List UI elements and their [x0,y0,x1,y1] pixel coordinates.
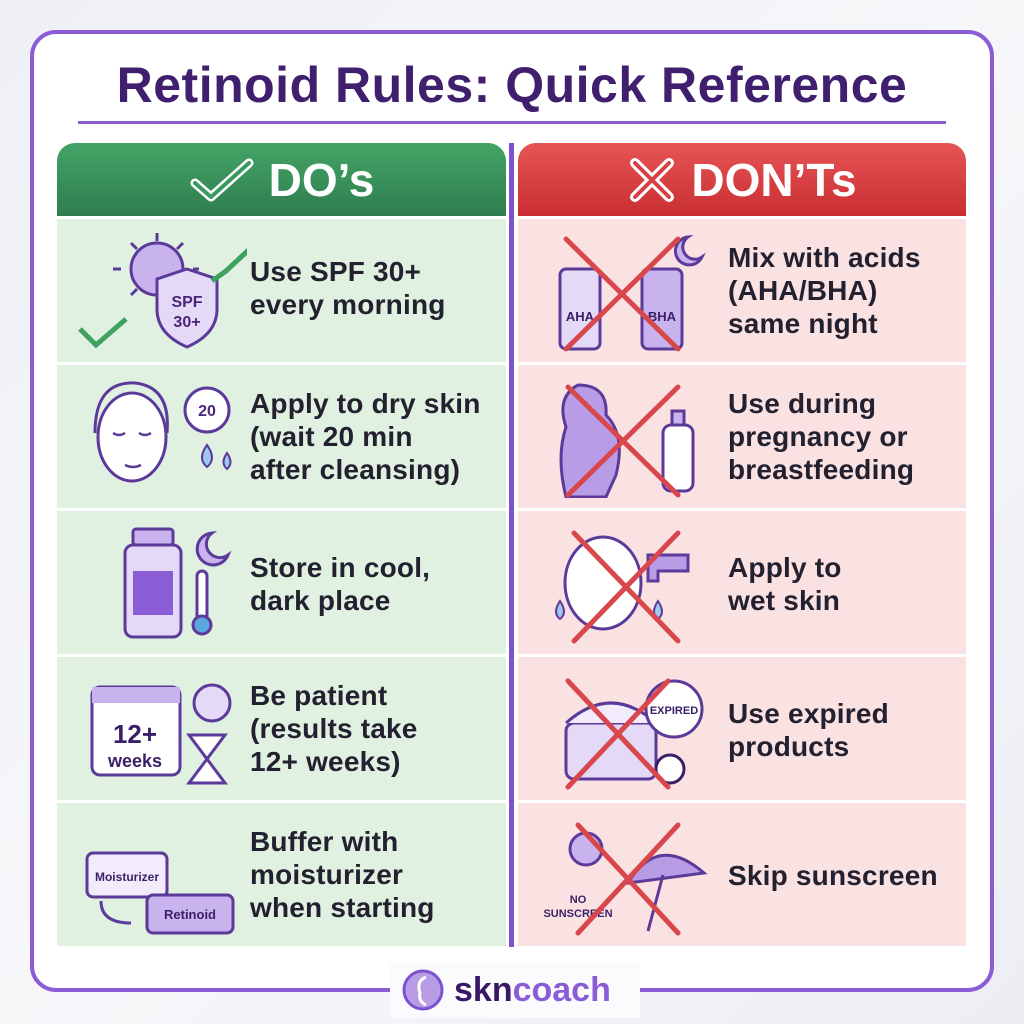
icon: sun umbrella: SUNSCREEN [543,908,613,920]
do row 4: patient: 12+ weeks) [250,746,401,777]
dont row 4: expired: products [728,731,849,762]
icon: sun shield: 30+ [173,314,201,331]
icon: jars [86,852,234,934]
dont row 1: acids: Mix with acids [728,242,921,273]
header: DON'Ts: DON’Ts [691,154,857,206]
dont row 2: pregnancy: pregnancy or [728,421,908,452]
icon: crossed bottles: BHA [648,309,677,324]
dont row 2: pregnancy: breastfeeding [728,454,914,485]
do row 3: store [57,511,506,654]
do row 1: SPF: Use SPF 30+ [250,256,421,287]
logo: skncoach [454,970,611,1008]
icon: sun umbrella: NO [570,894,587,906]
icon: pregnant woman bottle [560,384,694,498]
do row 3: store: dark place [250,585,391,616]
dont row 2: pregnancy [518,365,966,508]
do row 1: SPF: every morning [250,289,446,320]
icon: calendar hourglass: weeks [107,751,162,771]
header: DOs [57,143,506,216]
dont row 5: sunscreen [518,803,966,946]
icon: calendar hourglass [90,684,232,784]
icon: cracked jar clock biohazard [564,678,704,790]
icon: sun umbrella [543,822,708,936]
do row 5: buffer: moisturizer [250,859,403,890]
title: Retinoid Rules: Quick Reference [117,57,907,113]
do row 4: patient: (results take [250,713,418,744]
do row 3: store: Store in cool, [250,552,430,583]
do row 4: patient [57,657,506,800]
dont row 3: wet skin [518,511,966,654]
logo [390,962,640,1018]
dont row 1: acids: (AHA/BHA) [728,275,878,306]
dont row 3: wet skin: Apply to [728,552,842,583]
icon: face clock drops [94,381,232,482]
icon: bottle moon thermometer [124,528,232,638]
dont row 4: expired [518,657,966,800]
do row 1: SPF [57,219,506,362]
dont row 5: sunscreen: Skip sunscreen [728,860,938,891]
icon: sun shield [78,233,247,349]
do row 4: patient: Be patient [250,680,387,711]
icon: crossed bottles: AHA [566,309,595,324]
dont row 4: expired: Use expired [728,698,889,729]
do row 5: buffer: Buffer with [250,826,398,857]
icon: jars: Retinoid [164,907,216,922]
icon: jars: Moisturizer [95,870,159,884]
do row 2: dry skin: after cleansing) [250,454,460,485]
icon: cracked jar clock biohazard: EXPIRED [650,705,698,717]
do row 5: buffer [57,803,506,946]
header: DON'Ts [518,143,966,216]
dont row 3: wet skin: wet skin [728,585,840,616]
do row 2: dry skin [57,365,506,508]
do row 2: dry skin: Apply to dry skin [250,388,481,419]
dont row 1: acids [518,219,966,362]
icon: face clock drops: 20 [198,403,216,420]
icon: face tap drops [555,530,690,644]
do row 2: dry skin: (wait 20 min [250,421,413,452]
icon: crossed bottles [558,235,706,352]
dont row 1: acids: same night [728,308,878,339]
icon: sun shield: SPF [171,294,203,311]
icon: calendar hourglass: 12+ [113,719,157,749]
header: DOs: DO’s [269,154,374,206]
dont row 2: pregnancy: Use during [728,388,876,419]
do row 5: buffer: when starting [250,892,435,923]
